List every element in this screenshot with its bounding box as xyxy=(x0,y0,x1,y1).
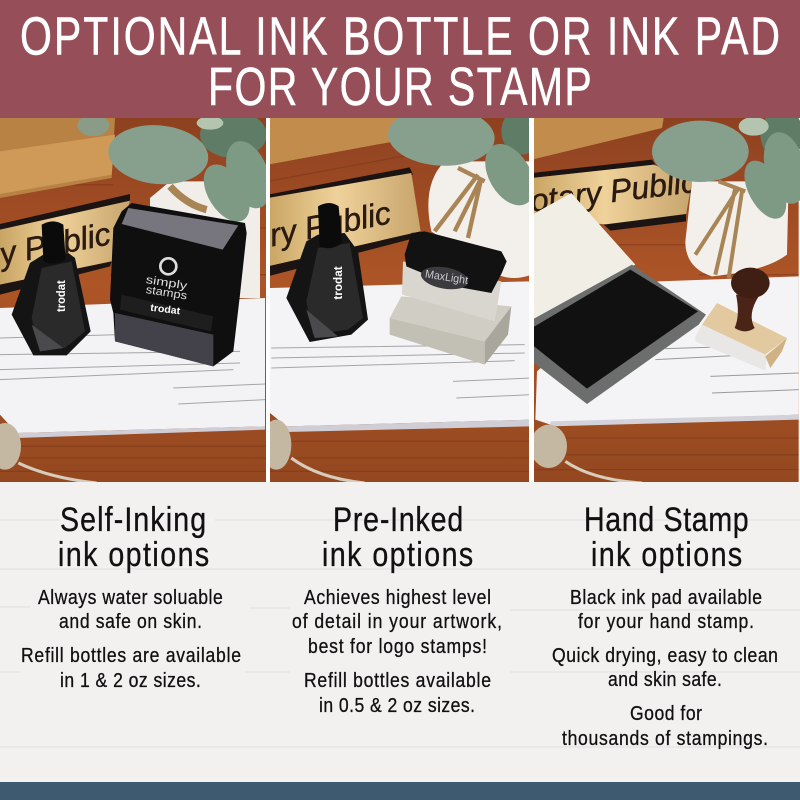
description: Black ink pad available xyxy=(570,586,762,608)
panel: self-inking photo xyxy=(0,111,279,485)
leaves xyxy=(77,111,279,230)
description: and safe on skin. xyxy=(59,610,202,632)
twine xyxy=(170,186,207,210)
panel: hand stamp photo xyxy=(528,110,800,485)
panel: hand stamp photo: otary Public xyxy=(528,163,699,219)
icon: self-inking stamp: trodat xyxy=(150,303,181,317)
crate xyxy=(0,118,115,198)
vase xyxy=(428,161,531,278)
description: thousands of stampings. xyxy=(562,727,768,749)
description: Achieves highest level xyxy=(304,586,491,608)
icon: self-inking stamp xyxy=(110,203,247,366)
column: hand stamp text xyxy=(552,501,778,749)
paper xyxy=(0,298,265,433)
heading: Pre-Inked xyxy=(333,501,463,539)
description: Refill bottles are available xyxy=(21,644,241,666)
name plate xyxy=(532,160,655,178)
vase xyxy=(685,181,789,276)
description: Refill bottles available xyxy=(304,669,491,691)
name plate xyxy=(0,194,130,231)
icon: ink pad xyxy=(532,193,706,404)
heading: ink options xyxy=(591,536,742,574)
leaves xyxy=(652,118,800,219)
icon: pre-inked stamp: MaxLight xyxy=(424,268,470,287)
description: Always water soluable xyxy=(38,586,223,608)
paper xyxy=(268,281,531,426)
footer bar xyxy=(0,782,800,800)
panel: pre-inked photo: ry Public xyxy=(266,194,394,253)
name plate xyxy=(268,167,413,200)
crate xyxy=(532,118,664,160)
description: of detail in your artwork, xyxy=(292,610,502,632)
heading xyxy=(322,501,473,574)
column: pre-inked text xyxy=(292,501,502,716)
paper xyxy=(535,276,799,425)
heading: Hand Stamp xyxy=(584,501,749,539)
title text: FOR YOUR STAMP xyxy=(208,58,592,117)
icon: self-inking stamp: simply xyxy=(145,274,188,293)
description: Quick drying, easy to clean xyxy=(552,644,778,666)
panel: pre-inked photo xyxy=(270,118,529,482)
description: best for logo stamps! xyxy=(308,635,487,657)
twine xyxy=(695,181,745,278)
twine xyxy=(435,168,485,238)
column: self-inking text xyxy=(21,501,241,691)
heading xyxy=(584,501,749,574)
description xyxy=(21,586,241,691)
description xyxy=(552,586,778,749)
icon: ink bottle: trodat xyxy=(331,266,345,300)
icon: ink bottle xyxy=(12,221,91,355)
description: in 0.5 & 2 oz sizes. xyxy=(319,694,475,716)
heading: ink options xyxy=(322,536,473,574)
description: and skin safe. xyxy=(608,668,722,690)
heading: Self-Inking xyxy=(60,501,206,539)
heading: ink options xyxy=(58,536,209,574)
page background: white wood planks xyxy=(0,482,800,782)
icon: ink bottle xyxy=(286,203,368,342)
dried flower xyxy=(0,423,97,483)
icon: self-inking stamp: stamps xyxy=(145,284,188,303)
description: in 1 & 2 oz sizes. xyxy=(60,669,201,691)
icon: ink bottle: trodat xyxy=(54,280,68,312)
heading xyxy=(58,501,209,574)
title banner xyxy=(0,0,800,118)
description: Good for xyxy=(630,702,702,724)
title text xyxy=(20,7,780,117)
title text: OPTIONAL INK BOTTLE OR INK PAD xyxy=(20,7,780,67)
dried flower xyxy=(261,420,365,483)
icon: pre-inked stamp xyxy=(390,231,511,365)
description xyxy=(292,586,502,716)
leaves xyxy=(388,118,529,206)
vase xyxy=(150,181,260,298)
description: for your hand stamp. xyxy=(578,610,754,632)
dried flower xyxy=(530,425,642,483)
crate xyxy=(268,118,398,165)
icon: wooden hand stamp xyxy=(695,268,787,371)
